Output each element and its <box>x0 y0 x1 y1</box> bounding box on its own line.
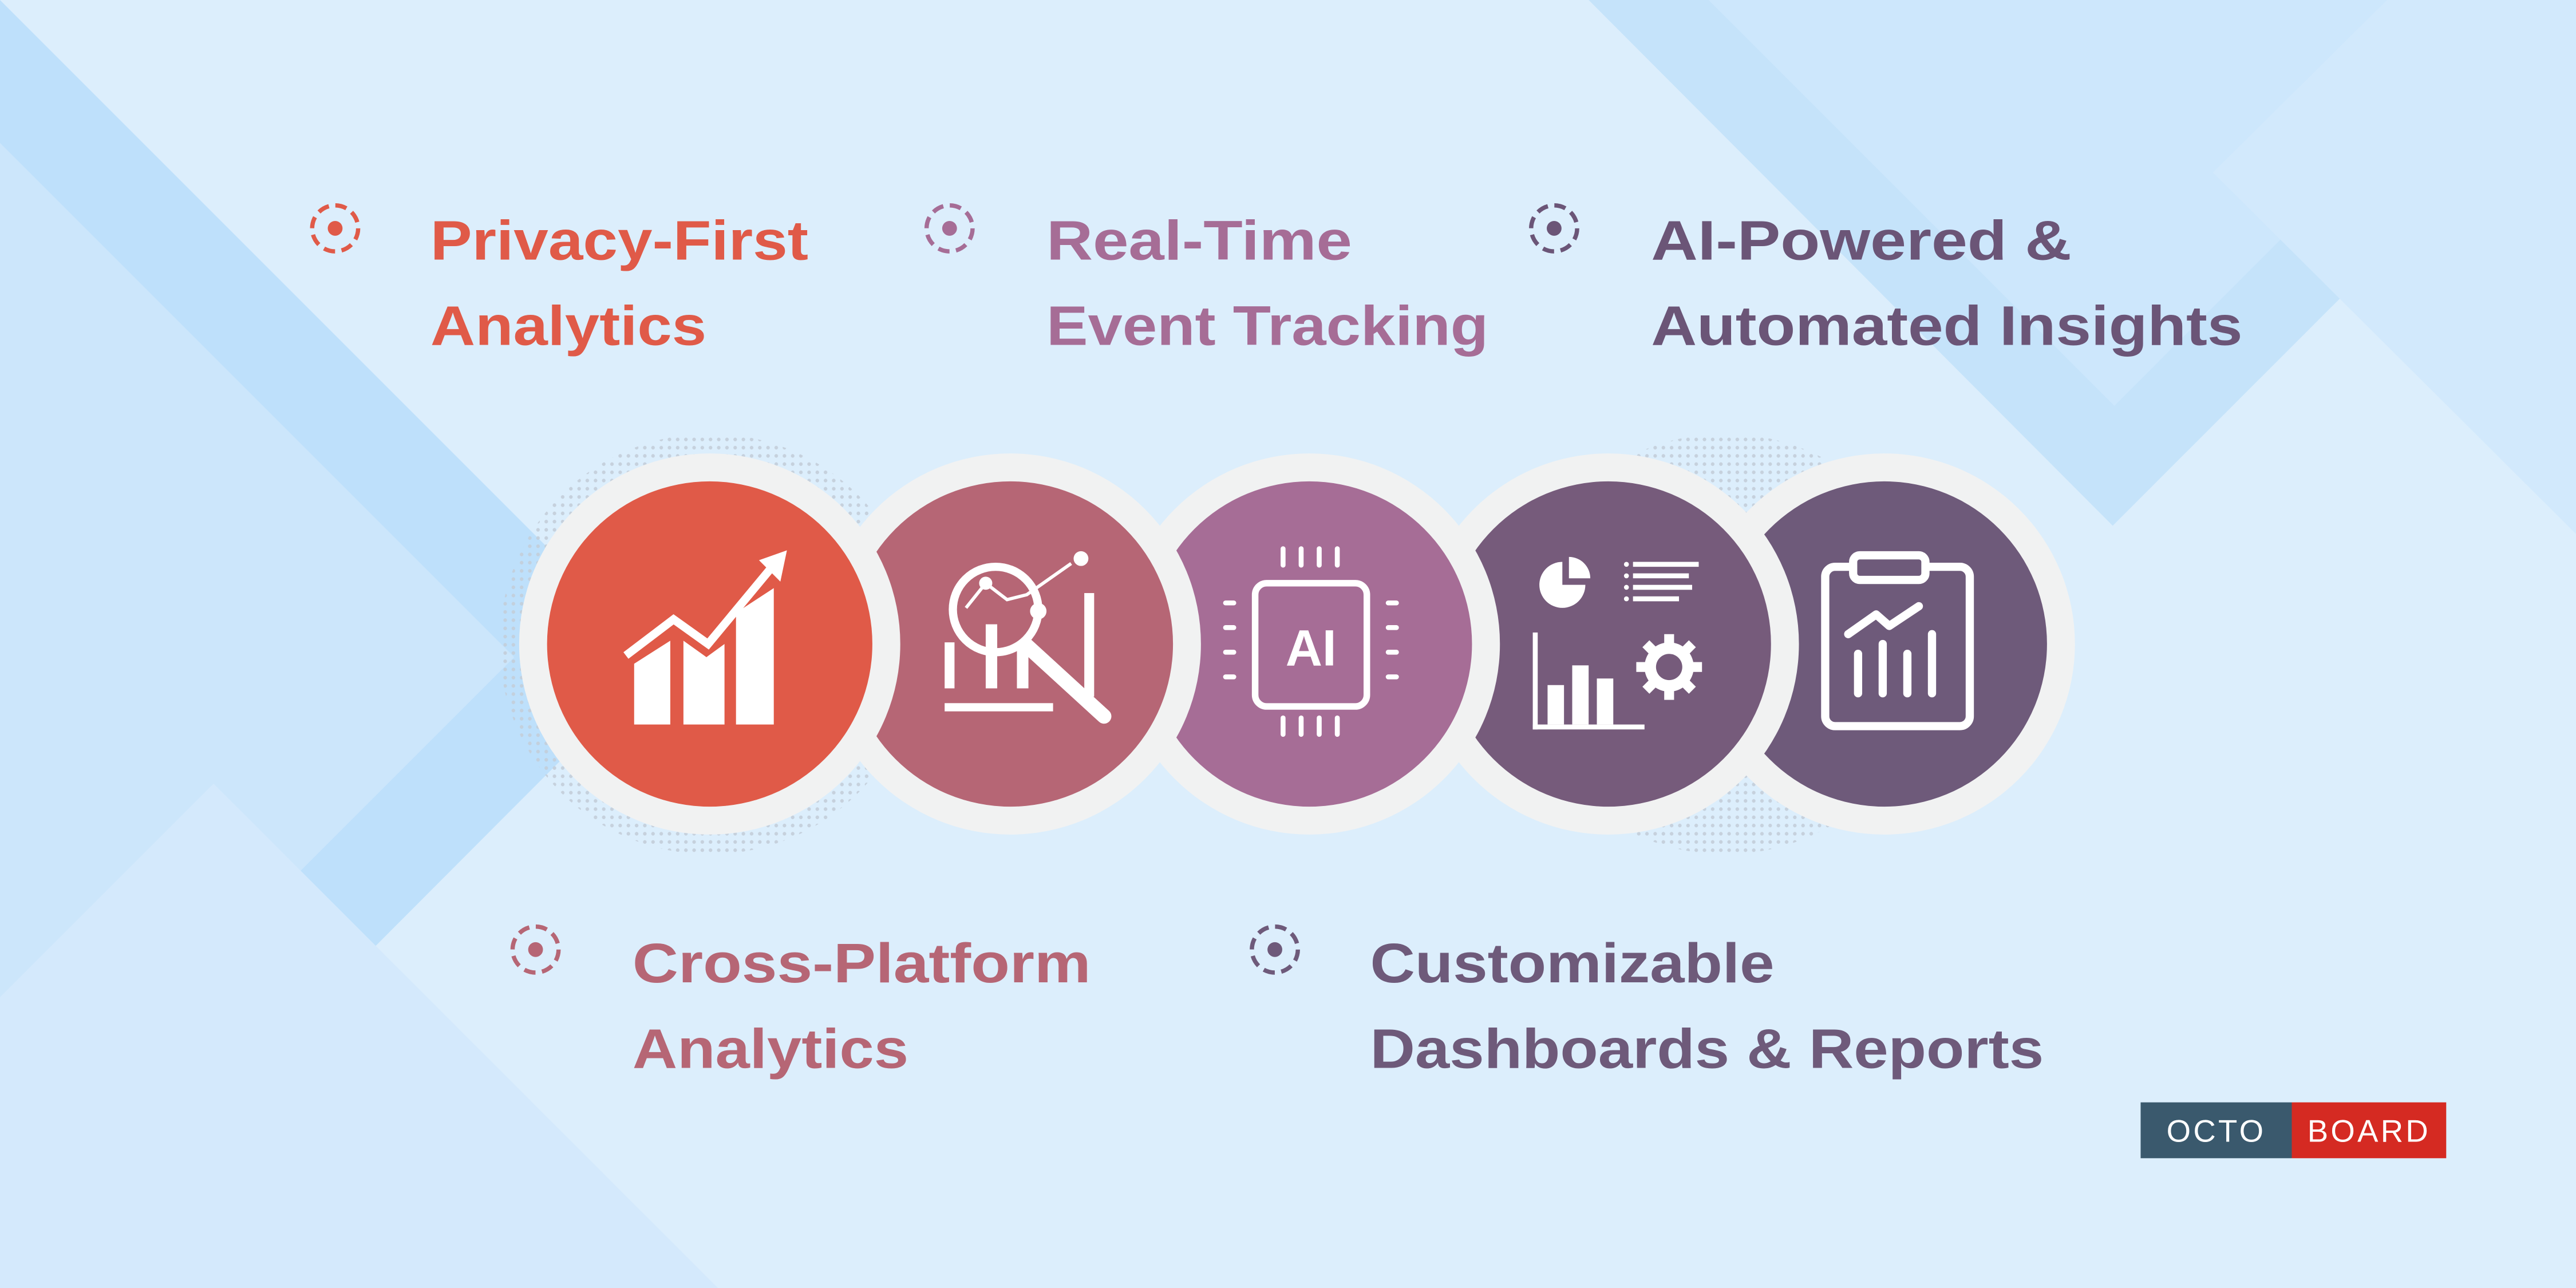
icon: AI chip <box>1226 549 1396 734</box>
icon: target bullet <box>1252 927 1298 973</box>
dotted halo right <box>1515 434 1935 854</box>
feature: Cross-Platform Analytics: Analytics <box>633 1017 908 1080</box>
circle 2: cross-platform / magnifier <box>820 453 1201 835</box>
circle 5: dashboards <box>1694 453 2075 835</box>
feature: Privacy-First Analytics <box>312 206 808 357</box>
feature: Real-Time Event Tracking: Real-Time <box>1046 209 1352 271</box>
feature: Cross-Platform Analytics: Cross-Platform <box>633 932 1091 994</box>
feature: Privacy-First Analytics: Privacy-First <box>430 209 808 271</box>
icon: clipboard report <box>1825 555 1970 726</box>
feature: AI-Powered & Automated Insights <box>1531 206 2242 357</box>
logo: OCTOBOARD: BOARD <box>2308 1114 2431 1149</box>
feature: Privacy-First Analytics: Analytics <box>430 295 706 357</box>
feature: AI-Powered & Automated Insights: AI-Powered & <box>1651 209 2072 271</box>
feature: Customizable Dashboards & Reports: Customizable <box>1370 932 1774 994</box>
feature: Real-Time Event Tracking <box>927 206 1488 357</box>
icon: magnifier over chart <box>945 551 1104 716</box>
feature: Cross-Platform Analytics <box>512 927 1091 1080</box>
logo: OCTOBOARD <box>2140 1103 2446 1158</box>
icon: growth chart <box>626 550 787 725</box>
icon: target bullet <box>512 927 559 973</box>
icon: AI chip: AI <box>1286 619 1337 676</box>
feature: AI-Powered & Automated Insights: Automated Insights <box>1651 295 2242 357</box>
feature: Customizable Dashboards & Reports: Dashboards & Reports <box>1370 1017 2044 1080</box>
icon: target bullet <box>927 206 973 251</box>
feature: Real-Time Event Tracking: Event Tracking <box>1046 295 1488 357</box>
logo: OCTOBOARD: OCTO <box>2167 1114 2266 1149</box>
circle 4: AI insights <box>1418 453 1799 835</box>
circle 3: real-time / AI chip <box>1119 453 1500 835</box>
icon: target bullet <box>312 206 358 251</box>
circle 1: privacy-first <box>519 453 900 835</box>
icon: charts and gear <box>1533 557 1702 729</box>
icon: target bullet <box>1531 206 1577 251</box>
feature: Customizable Dashboards & Reports <box>1252 927 2044 1080</box>
dotted halo left <box>499 434 920 854</box>
